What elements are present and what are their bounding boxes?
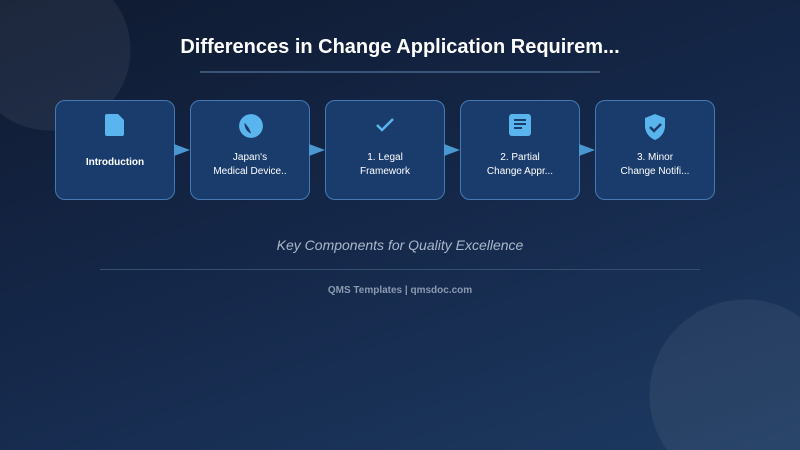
step: Japan's: Japan's [233,152,267,163]
footer: QMS Templates | qmsdoc.com [328,285,472,296]
arrow [444,144,460,156]
step: Legal: Framework [360,166,410,177]
step: Minor: Change Notifi... [621,166,689,177]
title: Differences in Change Application Requirem... [180,36,620,58]
step: Partial: 2. Partial [500,152,540,163]
step: Partial: Change Appr... [487,166,553,177]
arrow [579,144,595,156]
step: Japan's [190,100,310,200]
step: Minor [595,100,715,200]
step: Japan's: Medical Device.. [213,166,287,177]
step: Partial [460,100,580,200]
arrow [174,144,190,156]
step: Legal: 1. Legal [367,152,403,163]
step: Introduction: Introduction [86,157,144,168]
step: Legal [325,100,445,200]
step: Minor: 3. Minor [637,152,673,163]
step: Introduction [55,100,175,200]
arrow [309,144,325,156]
subtitle: Key Components for Quality Excellence [277,237,523,253]
